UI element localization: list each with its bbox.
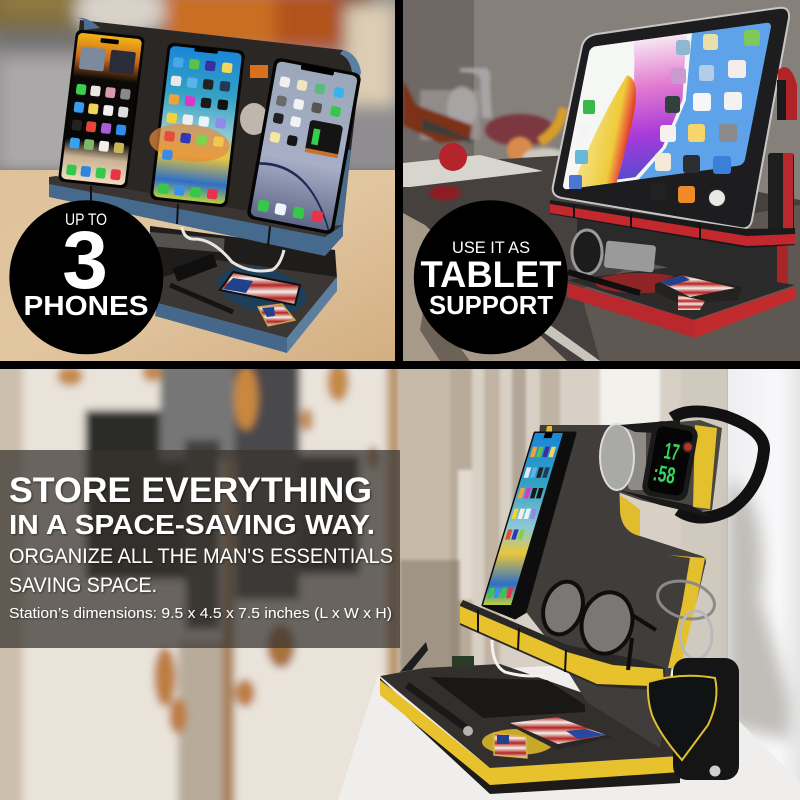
base (380, 678, 680, 794)
usb drive (452, 656, 474, 667)
counter (403, 155, 800, 361)
glasses (537, 576, 656, 670)
flag card (507, 717, 612, 750)
upright plate (523, 425, 706, 748)
panel: store everything (0, 360, 800, 800)
docking station, blue (49, 18, 362, 353)
badge: tablet support: SUPPORT (429, 290, 553, 320)
yellow pocket (482, 729, 554, 755)
charging cable (182, 227, 284, 271)
curtain background (396, 369, 728, 673)
subheading line 1: ORGANIZE ALL THE MAN'S ESSENTIALS (9, 545, 393, 568)
blurred hallway background (0, 360, 410, 800)
wall shadow (728, 480, 790, 740)
apple reflection (429, 186, 461, 200)
docking station, yellow (380, 411, 764, 794)
base (567, 266, 795, 320)
flag card (655, 274, 742, 304)
apple watch (641, 420, 699, 502)
pen and tools (170, 285, 233, 312)
heading line 2: IN A SPACE-SAVING WAY. (9, 509, 375, 540)
white table (338, 660, 800, 800)
under-shelf block (150, 226, 337, 280)
base surface (157, 260, 337, 338)
charging cable (492, 640, 545, 676)
wrist watch (572, 230, 656, 274)
phone 1 (58, 29, 145, 189)
wallet (430, 677, 585, 718)
shelf (460, 600, 665, 690)
blurred living room background (0, 0, 395, 170)
tablet (553, 8, 789, 228)
panel: up to 3 phones (0, 0, 420, 361)
back plate (79, 20, 356, 211)
badge: tablet support: TABLET (420, 254, 562, 295)
blurred kitchen items (403, 68, 567, 166)
apple (439, 143, 467, 171)
heading line 1: STORE EVERYTHING (9, 471, 372, 510)
cutting board (403, 155, 543, 187)
phone 2 (142, 41, 245, 208)
dimensions: Station’s dimensions: 9.5 x 4.5 x 7.5 inches (L x W x H) (9, 605, 392, 622)
flag pin (494, 733, 527, 758)
badge: tablet support (414, 200, 568, 354)
shelf (550, 200, 795, 248)
side upright (334, 150, 351, 226)
subheading line 2: SAVING SPACE. (9, 574, 157, 597)
key shield (648, 676, 716, 760)
flag pin (258, 304, 295, 326)
badge: tablet support: USE IT AS (452, 238, 530, 257)
badge: up to 3 phones (9, 200, 163, 354)
white wall (728, 369, 800, 800)
under block (577, 218, 777, 287)
rear uprights (768, 153, 794, 235)
flag pin (678, 295, 705, 310)
watch holder arm (610, 420, 722, 512)
watch band (672, 411, 764, 518)
badge: up to 3 phones: UP TO (65, 210, 107, 229)
apple watch: :58 (651, 459, 677, 489)
pen (407, 685, 473, 736)
key ring (653, 575, 719, 659)
stand (550, 67, 797, 338)
flag card (220, 272, 300, 305)
pen (568, 272, 640, 293)
apple watch: 17 (662, 437, 681, 466)
car key (648, 658, 739, 780)
wooden table (0, 170, 395, 361)
translucent text band (0, 450, 400, 648)
kitchen wall background (403, 0, 800, 200)
phone (483, 433, 575, 618)
badge: up to 3 phones: 3 (62, 215, 108, 306)
panel: tablet support (403, 0, 800, 361)
phone 3 (246, 57, 362, 235)
analog watch (600, 420, 715, 518)
shelf (49, 176, 343, 256)
badge: up to 3 phones: PHONES (24, 290, 148, 321)
cabinet front (403, 213, 567, 361)
text block: store everything (9, 471, 393, 622)
stored card (400, 642, 428, 672)
